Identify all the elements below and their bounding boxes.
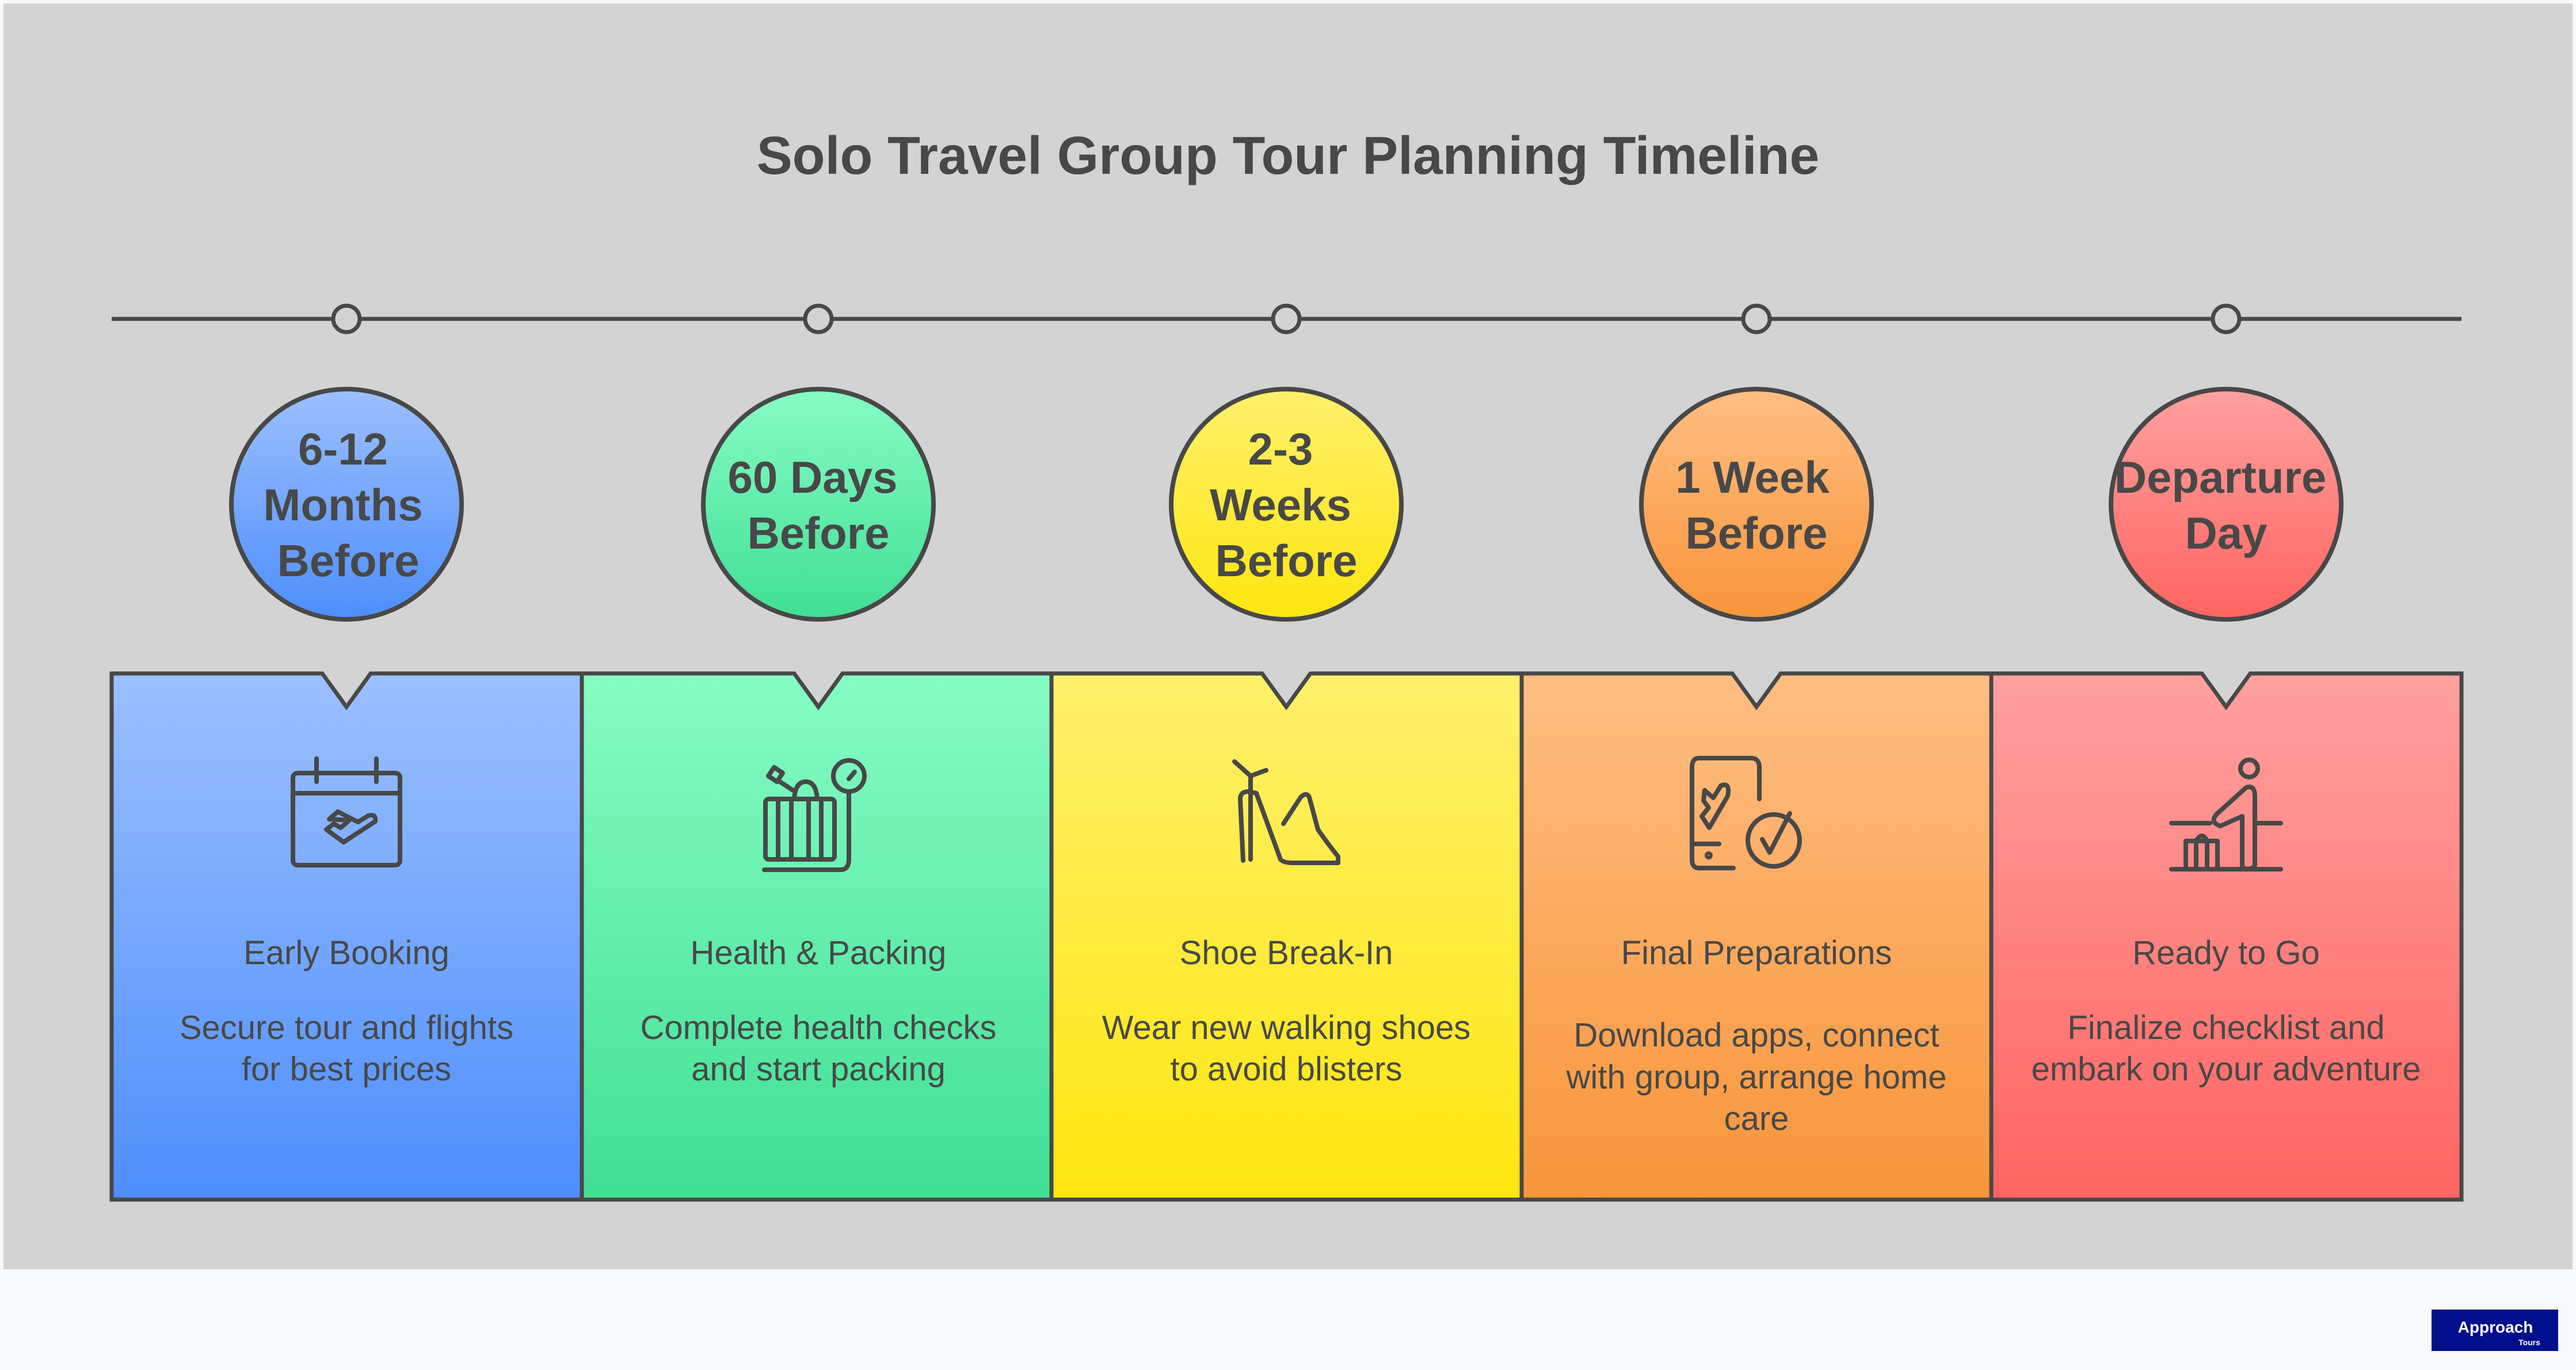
icon: phone with check [1692, 758, 1800, 868]
panel: Early Booking: Early Booking [243, 934, 449, 972]
circle: 2-3 Weeks Before: 2-3 [1248, 424, 1313, 474]
panel: Shoe Break-In: Shoe Break-In [1180, 934, 1393, 972]
circle: 60 Days Before: Before [747, 508, 890, 558]
icon: podium with person [2171, 760, 2281, 869]
circle: 2-3 Weeks Before [1171, 389, 1401, 619]
title: Solo Travel Group Tour Planning Timeline [757, 125, 1819, 185]
circle: 6-12 Months Before: Months [263, 479, 423, 530]
circle: 6-12 Months Before: Before [277, 535, 420, 586]
panel: Early Booking: Secure tour and flights [180, 1009, 513, 1046]
timeline line with markers [112, 306, 2461, 332]
panel: Final Preparations [1522, 673, 1991, 1200]
icon: calendar plane [293, 759, 400, 865]
panel: Ready to Go [1991, 673, 2461, 1200]
panel: Final Preparations: Final Preparations [1621, 934, 1892, 972]
panel: Health & Packing [582, 673, 1051, 1200]
panel: Final Preparations: with group, arrange home [1566, 1059, 1946, 1096]
panel: Health & Packing: and start packing [691, 1051, 946, 1088]
panel: Final Preparations: care [1724, 1100, 1789, 1137]
panel: Early Booking: for best prices [242, 1051, 451, 1088]
panel: Ready to Go: Ready to Go [2132, 934, 2320, 972]
circle: 2-3 Weeks Before: Weeks [1210, 479, 1351, 530]
panel: Final Preparations: Download apps, connect [1573, 1017, 1939, 1054]
panel: Health & Packing: Complete health checks [640, 1009, 997, 1046]
logo: Approach Tours: Tours [2518, 1338, 2540, 1347]
circle: 6-12 Months Before [231, 389, 462, 619]
circle: 60 Days Before [703, 389, 933, 619]
circle: 1 Week Before: Before [1685, 508, 1828, 558]
circle: 1 Week Before [1641, 389, 1872, 619]
panel: Ready to Go: embark on your adventure [2031, 1051, 2421, 1088]
logo: Approach Tours [2432, 1310, 2558, 1351]
circle: Departure Day: Day [2185, 508, 2268, 558]
panel: Shoe Break-In [1051, 673, 1522, 1200]
circle: Departure Day: Departure [2114, 452, 2326, 503]
circle: 1 Week Before: 1 Week [1675, 452, 1830, 503]
panel: Early Booking [112, 673, 582, 1200]
panel: Health & Packing: Health & Packing [691, 934, 946, 972]
icon: luggage and stopwatch [764, 760, 864, 870]
circle: 2-3 Weeks Before: Before [1215, 535, 1358, 586]
circle: 60 Days Before: 60 Days [728, 452, 897, 503]
panel: Shoe Break-In: to avoid blisters [1171, 1051, 1402, 1088]
panel: Ready to Go: Finalize checklist and [2067, 1009, 2385, 1046]
icon: high heel shoe [1234, 762, 1338, 863]
panel: Shoe Break-In: Wear new walking shoes [1102, 1009, 1470, 1046]
circle: Departure Day [2111, 389, 2341, 619]
logo: Approach Tours: Approach [2458, 1318, 2533, 1336]
circle: 6-12 Months Before: 6-12 [298, 424, 388, 474]
